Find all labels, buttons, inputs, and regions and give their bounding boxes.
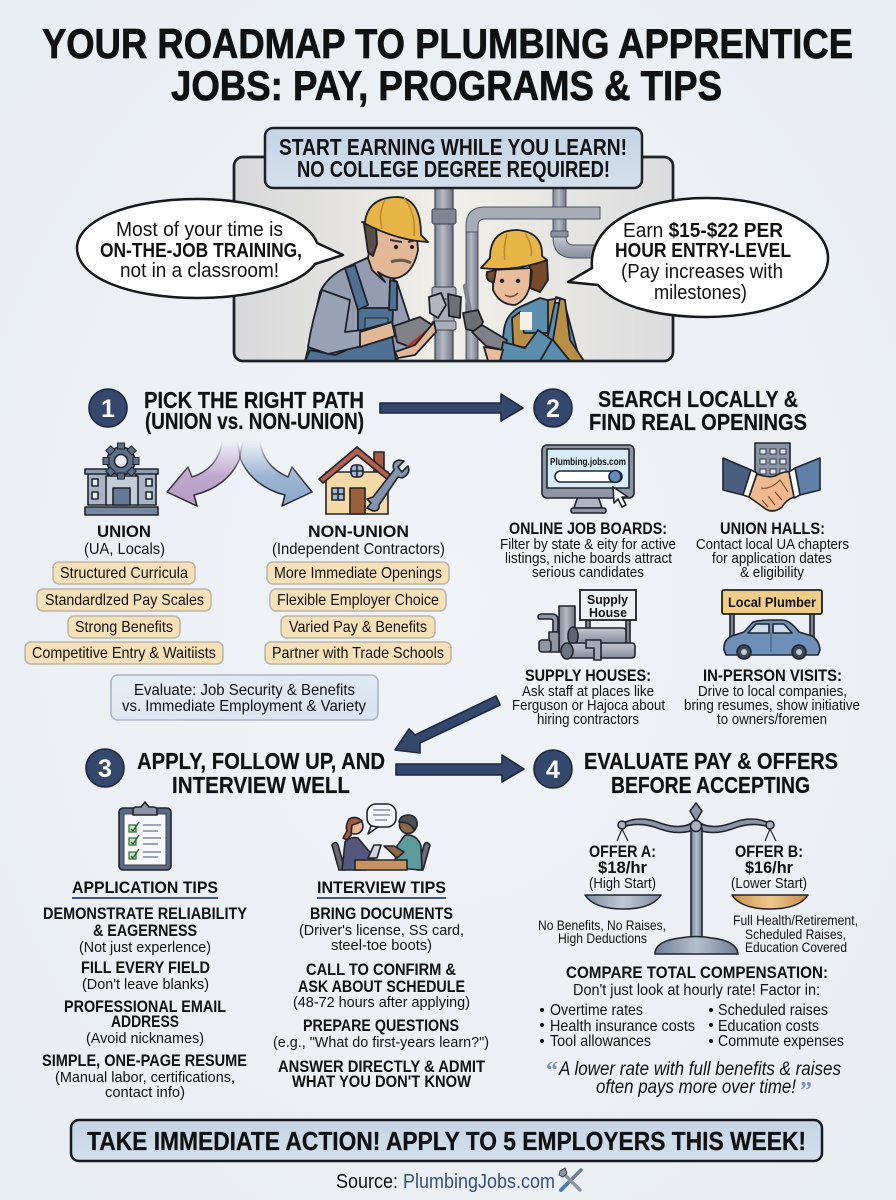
icon: interview at table	[332, 804, 430, 870]
arrow: step 2 to step 3	[395, 696, 500, 753]
step 4 heading: BEFORE ACCEPTING	[611, 772, 810, 798]
in-person visits text: to owners/foremen	[717, 711, 827, 728]
union column	[25, 522, 223, 664]
in-person visits text: Drive to local companies,	[698, 683, 847, 700]
application tips: PROFESSIONAL EMAIL	[64, 997, 226, 1016]
application tips: FILL EVERY FIELD	[81, 958, 210, 977]
step 2 heading	[534, 386, 807, 435]
compare total compensation: Scheduled raises	[718, 1002, 828, 1019]
illustration: older plumber	[305, 197, 461, 361]
compare total compensation: Tool allowances	[550, 1033, 651, 1050]
helmet	[362, 197, 428, 242]
compare total compensation: Overtime rates	[550, 1002, 643, 1019]
non-union column	[265, 522, 451, 664]
speech bubble: on-the-job training: Most of your time is	[116, 219, 283, 241]
call to action banner	[71, 1120, 822, 1161]
application tips: (Don't leave blanks)	[82, 976, 209, 993]
application tips: (Not just experlence)	[79, 939, 211, 956]
title: JOBS: PAY, PROGRAMS & TIPS	[171, 62, 722, 109]
icon: local plumber sign and car	[722, 590, 822, 659]
compare total compensation: Commute expenses	[718, 1033, 844, 1050]
online job boards text: ONLINE JOB BOARDS:	[509, 519, 667, 538]
step 4 heading: EVALUATE PAY & OFFERS	[584, 748, 838, 774]
icon: supply house pipes and sign: Supply	[587, 592, 629, 607]
speech bubble: on-the-job training: ON-THE-JOB TRAINING,	[100, 240, 302, 262]
source line: Source:	[336, 1171, 398, 1193]
application tips: APPLICATION TIPS	[72, 878, 218, 897]
application tips	[42, 878, 248, 1101]
banner: start earning: NO COLLEGE DEGREE REQUIRED!	[297, 156, 610, 182]
supply houses text: SUPPLY HOUSES:	[525, 666, 651, 685]
arrow: step 1 to step 2	[380, 394, 523, 421]
icon: union building with gear	[85, 443, 158, 515]
speech bubble: pay: milestones)	[654, 282, 747, 304]
interview tips	[273, 878, 489, 1091]
quote: ”	[800, 1078, 812, 1104]
step 3 heading: 3	[98, 755, 112, 783]
step 4 heading	[534, 748, 838, 798]
icon: supply house pipes and sign: House	[589, 605, 627, 620]
application tips: (Manual labor, certifications,	[55, 1069, 235, 1086]
in-person visits text: IN-PERSON VISITS:	[703, 666, 842, 685]
non-union column: (Independent Contractors)	[272, 541, 445, 558]
compare total compensation: Health insurance costs	[550, 1018, 695, 1035]
step 2 heading: SEARCH LOCALLY &	[598, 386, 798, 412]
pill: trade schools: Partner with Trade Schools	[272, 645, 444, 662]
union halls text: Contact local UA chapters	[696, 536, 849, 553]
step 4 heading: 4	[546, 756, 560, 784]
offer A: OFFER A:	[589, 842, 656, 861]
source line: PlumbingJobs.com	[403, 1171, 555, 1193]
pill: standardized pay	[37, 589, 211, 611]
union halls text: & eligibility	[740, 564, 804, 581]
pill: competitive entry: Competitive Entry & Waitiists	[32, 645, 216, 662]
evaluate callout: Evaluate: Job Security & Benefits	[134, 682, 355, 699]
shirt	[305, 258, 414, 361]
compare total compensation: Don't just look at hourly rate! Factor in:	[573, 982, 820, 999]
in-person visits text	[684, 666, 860, 728]
illustration: young apprentice	[463, 230, 584, 361]
application tips: (Avoid nicknames)	[86, 1030, 204, 1047]
quote: often pays more over time!	[596, 1077, 797, 1098]
compare total compensation: COMPARE TOTAL COMPENSATION:	[566, 963, 828, 982]
speech bubble: pay: HOUR ENTRY-LEVEL	[615, 240, 791, 262]
supply houses text	[512, 666, 666, 728]
step 1 heading: 1	[101, 395, 115, 423]
offer A: $18/hr	[598, 858, 647, 877]
pill: immediate openings: More Immediate Openings	[274, 565, 442, 582]
step 3 heading: APPLY, FOLLOW UP, AND	[137, 748, 385, 774]
offer A: (High Start)	[589, 875, 656, 892]
interview tips: PREPARE QUESTIONS	[303, 1016, 459, 1035]
pill: varied pay: Varied Pay & Benefits	[289, 619, 427, 636]
step 1 heading: PICK THE RIGHT PATH	[144, 387, 364, 413]
compare total compensation: Education costs	[718, 1018, 819, 1035]
union halls text: for application dates	[712, 550, 832, 567]
helmet	[481, 230, 547, 269]
offer B: Full Health/Retirement,	[733, 912, 858, 928]
speech bubble: pay: (Pay increases with	[621, 261, 783, 283]
application tips: contact info)	[105, 1084, 185, 1101]
step 1 heading	[89, 387, 364, 434]
icon: local plumber sign and car: Local Plumber	[728, 595, 817, 610]
curved arrow: to union	[167, 441, 240, 506]
in-person visits text: bring resumes, show initiative	[684, 697, 860, 714]
icon: handshake with building	[723, 443, 820, 511]
offer A: High Deductions	[558, 930, 647, 946]
supply houses text: Ask staff at places like	[522, 683, 654, 700]
quote	[546, 1058, 841, 1104]
offer B	[731, 842, 858, 955]
speech bubble: on-the-job training: not in a classroom!	[120, 260, 279, 282]
face	[493, 268, 531, 305]
pill: structured curricula: Structured Curricula	[60, 565, 188, 582]
online job boards text: Filter by state & eity for active	[500, 536, 676, 553]
neck and face	[368, 225, 418, 282]
shirt	[500, 298, 580, 361]
offer A	[538, 842, 666, 946]
offer B: $16/hr	[745, 858, 793, 877]
quote: “	[546, 1058, 558, 1084]
interview tips: (Driver's license, SS card,	[299, 922, 464, 939]
title	[42, 20, 853, 109]
supply houses text: Ferguson or Hajoca about	[512, 697, 666, 714]
offer A: No Benefits, No Raises,	[538, 917, 666, 933]
wrench and gloves	[465, 286, 470, 312]
harness	[512, 297, 584, 361]
offer B: OFFER B:	[735, 842, 803, 861]
interview tips: ANSWER DIRECTLY & ADMIT	[278, 1057, 486, 1076]
union column: UNION	[97, 522, 151, 541]
interview tips: steel-toe boots)	[331, 937, 432, 954]
evaluate callout: vs. Immediate Employment & Variety	[122, 698, 366, 715]
icon: supply house pipes and sign	[538, 590, 636, 660]
interview tips: INTERVIEW TIPS	[317, 878, 446, 897]
quote: A lower rate with full benefits & raises	[558, 1059, 841, 1080]
online job boards text: serious candidates	[532, 564, 644, 581]
arrow: step 3 to step 4	[396, 755, 524, 782]
step 3 heading: INTERVIEW WELL	[172, 772, 350, 798]
offer B: Scheduled Raises,	[745, 926, 846, 942]
icon: balance scale	[585, 803, 808, 954]
application tips: ADDRESS	[111, 1012, 179, 1031]
offer B: (Lower Start)	[731, 875, 807, 892]
application tips: & EAGERNESS	[93, 921, 197, 940]
supply houses text: hiring contractors	[537, 711, 639, 728]
online job boards text	[500, 519, 676, 581]
application tips: SIMPLE, ONE-PAGE RESUME	[42, 1051, 247, 1070]
sleeve and forearm	[308, 290, 395, 354]
offer B: Education Covered	[745, 939, 847, 955]
interview tips: (48-72 hours after applying)	[293, 994, 470, 1011]
pill: standardized pay: Standardlzed Pay Scales	[45, 592, 204, 609]
compare total compensation	[540, 963, 844, 1050]
online job boards text: listings, niche boards attract	[505, 550, 673, 567]
step 2 heading: FIND REAL OPENINGS	[589, 409, 807, 435]
union halls text	[696, 519, 849, 581]
step 1 heading: (UNION vs. NON-UNION)	[145, 408, 364, 434]
speech bubble: on-the-job training	[77, 199, 343, 298]
illustration: back pipes	[432, 185, 600, 361]
icon: monitor with job board: Plumbing.jobs.com	[550, 457, 626, 468]
banner: start earning	[265, 128, 642, 188]
union column: (UA, Locals)	[84, 541, 165, 558]
overalls	[305, 308, 396, 361]
interview tips: WHAT YOU DON'T KNOW	[292, 1072, 472, 1091]
interview tips: BRING DOCUMENTS	[310, 904, 453, 923]
speech bubble: pay: Earn $15-$22 PER	[623, 220, 784, 242]
icon: house with wrench	[319, 447, 409, 514]
icon: crossed tools	[559, 1168, 581, 1190]
pill: flexible employer: Flexible Employer Choice	[277, 592, 439, 609]
interview tips: ASK ABOUT SCHEDULE	[298, 977, 465, 996]
icon: monitor with job board	[542, 445, 634, 513]
hero panel: two plumbers working on pipes	[234, 157, 673, 361]
evaluate callout	[111, 675, 378, 720]
icon: clipboard checklist	[119, 802, 171, 870]
non-union column: NON-UNION	[308, 522, 409, 541]
speech bubble: pay	[568, 198, 828, 317]
interview tips: CALL TO CONFIRM &	[306, 960, 456, 979]
interview tips: (e.g., "What do first-years learn?")	[273, 1034, 489, 1051]
curved arrow: to non-union	[240, 441, 312, 506]
source line	[336, 1171, 555, 1193]
step 3 heading	[86, 748, 385, 798]
pill: strong benefits: Strong Benefits	[75, 619, 173, 636]
application tips: DEMONSTRATE RELIABILITY	[43, 904, 248, 923]
banner: start earning: START EARNING WHILE YOU LEARN!	[279, 134, 627, 160]
call to action banner: TAKE IMMEDIATE ACTION! APPLY TO 5 EMPLOYERS THIS WEEK!	[87, 1126, 806, 1156]
step 2 heading: 2	[546, 395, 560, 423]
left glove on pipe	[429, 293, 446, 318]
union halls text: UNION HALLS:	[720, 519, 825, 538]
